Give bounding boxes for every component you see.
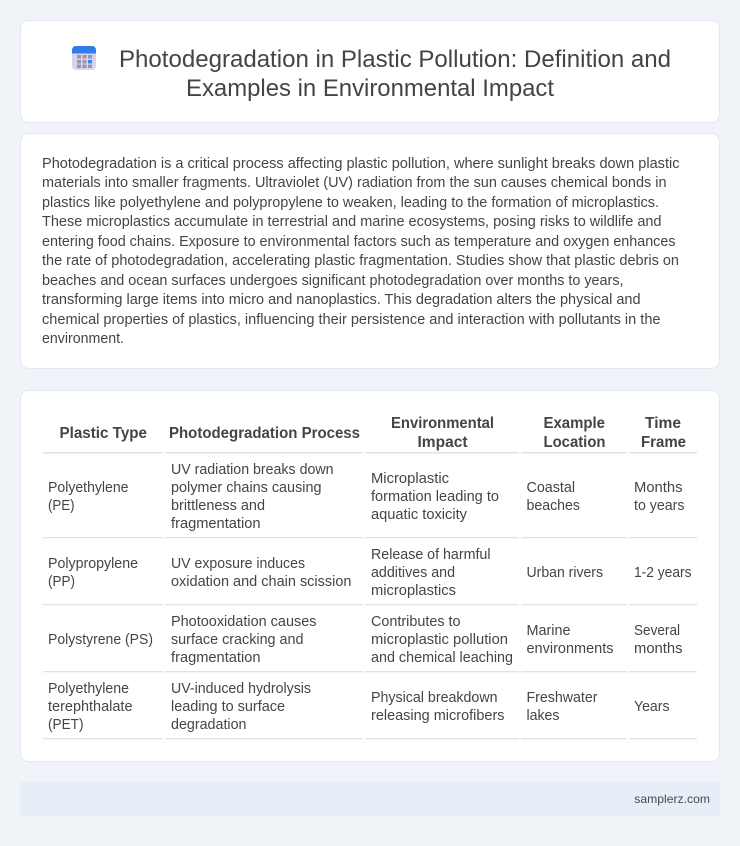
table header: Time bbox=[645, 415, 681, 432]
table row: polyethylene: (PE) bbox=[48, 498, 74, 514]
table header: Impact bbox=[418, 434, 468, 451]
table row: polyethylene bbox=[48, 462, 684, 532]
table header: Example bbox=[544, 415, 605, 432]
text block: description: transforming large items into micro and nanoplastics. This degradation alters the physical and bbox=[42, 292, 640, 308]
table row: polypropylene: UV exposure induces bbox=[171, 556, 305, 572]
text block: description: Photodegradation is a critical process affecting plastic pollution, where sunlight breaks down plastic bbox=[42, 156, 680, 172]
table row: polyethylene: formation leading to bbox=[371, 489, 499, 505]
table row: polyethylene terephthalate: Polyethylene bbox=[48, 681, 129, 697]
table row: polyethylene terephthalate: UV-induced hydrolysis bbox=[171, 681, 311, 697]
table row: polyethylene terephthalate: lakes bbox=[526, 708, 560, 724]
table row: polystyrene: Several bbox=[634, 623, 680, 639]
table row: polyethylene: Coastal bbox=[526, 480, 575, 496]
text block: description: the rate of photodegradation, accelerating plastic fragmentation. Studies show that plastic debris on bbox=[42, 253, 679, 269]
table row: polypropylene bbox=[48, 547, 692, 599]
table row: polyethylene terephthalate bbox=[48, 681, 670, 733]
table header: Photodegradation Process bbox=[169, 425, 360, 442]
table row: polyethylene: to years bbox=[634, 498, 684, 514]
table row: polypropylene: Polypropylene bbox=[48, 556, 138, 572]
text block: description: chemical properties of plastics, influencing their persistence and interaction with pollutants in the bbox=[42, 312, 661, 328]
table row: polyethylene terephthalate: Years bbox=[634, 699, 670, 715]
table row: polyethylene: UV radiation breaks down bbox=[171, 462, 334, 478]
table row: polypropylene: Urban rivers bbox=[526, 565, 603, 581]
text block: description: beaches and ocean surfaces undergoes significant photodegradation over months to years, bbox=[42, 273, 624, 289]
table header: Environmental bbox=[391, 415, 494, 432]
table row: polystyrene: environments bbox=[526, 641, 614, 657]
footer: samplerz.com bbox=[634, 792, 710, 806]
text block: description: These microplastics accumulate in terrestrial and marine ecosystems, posing risks to wildlife and bbox=[42, 214, 662, 230]
title bbox=[119, 46, 671, 102]
text block: description: entering food chains. Exposure to environmental factors such as temperature and oxygen enhances bbox=[42, 234, 676, 250]
table row: polystyrene: Polystyrene (PS) bbox=[48, 632, 153, 648]
table row: polypropylene: microplastics bbox=[371, 583, 456, 599]
table header: Plastic Type bbox=[60, 425, 147, 442]
table row: polystyrene bbox=[48, 614, 682, 666]
table header: Location bbox=[544, 434, 606, 451]
text block: description: materials into smaller fragments. Ultraviolet (UV) radiation from the sun causes chemical bonds in bbox=[42, 175, 666, 191]
panel: title card bbox=[20, 20, 720, 122]
table row: polyethylene: fragmentation bbox=[171, 516, 260, 532]
table row: polyethylene terephthalate: degradation bbox=[171, 717, 246, 733]
table row: polystyrene: microplastic pollution bbox=[371, 632, 508, 648]
icon: calendar bbox=[72, 46, 96, 70]
table row: polypropylene: Release of harmful bbox=[371, 547, 490, 563]
table header bbox=[60, 415, 686, 451]
table row: polyethylene: Polyethylene bbox=[48, 480, 128, 496]
table row: polystyrene: months bbox=[634, 641, 682, 657]
table row: polypropylene: (PP) bbox=[48, 574, 75, 590]
table row: polyethylene: Microplastic bbox=[371, 471, 449, 487]
table row: polyethylene terephthalate: (PET) bbox=[48, 717, 84, 733]
table row: polyethylene terephthalate: Physical breakdown bbox=[371, 690, 498, 706]
table row: polystyrene: Contributes to bbox=[371, 614, 460, 630]
title: Examples in Environmental Impact bbox=[186, 75, 554, 102]
table row: polyethylene: beaches bbox=[526, 498, 580, 514]
title: Photodegradation in Plastic Pollution: Definition and bbox=[119, 46, 671, 73]
text block: description bbox=[42, 156, 680, 347]
table row: polyethylene: Months bbox=[634, 480, 682, 496]
table row: polystyrene: and chemical leaching bbox=[371, 650, 513, 666]
table row: polyethylene terephthalate: leading to surface bbox=[171, 699, 285, 715]
panel: table card bbox=[20, 390, 720, 762]
table header: Frame bbox=[641, 434, 686, 451]
table row: polyethylene terephthalate: terephthalate bbox=[48, 699, 132, 715]
table row: polystyrene: Marine bbox=[526, 623, 570, 639]
panel: description text bbox=[20, 134, 720, 368]
text block: description: environment. bbox=[42, 331, 124, 347]
text block: description: plastics like polyethylene and polypropylene to weaken, leading to the formation of microplastics. bbox=[42, 195, 659, 211]
footer bbox=[20, 782, 720, 816]
table row: polypropylene: oxidation and chain scission bbox=[171, 574, 352, 590]
table row: polypropylene: additives and bbox=[371, 565, 455, 581]
table row: polystyrene: Photooxidation causes bbox=[171, 614, 316, 630]
table row: polypropylene: 1-2 years bbox=[634, 565, 692, 581]
table row: polyethylene terephthalate: releasing microfibers bbox=[371, 708, 504, 724]
table row: polystyrene: fragmentation bbox=[171, 650, 260, 666]
table row: polyethylene: brittleness and bbox=[171, 498, 265, 514]
table row: polyethylene terephthalate: Freshwater bbox=[526, 690, 598, 706]
table row: polystyrene: surface cracking and bbox=[171, 632, 304, 648]
table row: polyethylene: polymer chains causing bbox=[171, 480, 322, 496]
table row: polyethylene: aquatic toxicity bbox=[371, 507, 468, 523]
